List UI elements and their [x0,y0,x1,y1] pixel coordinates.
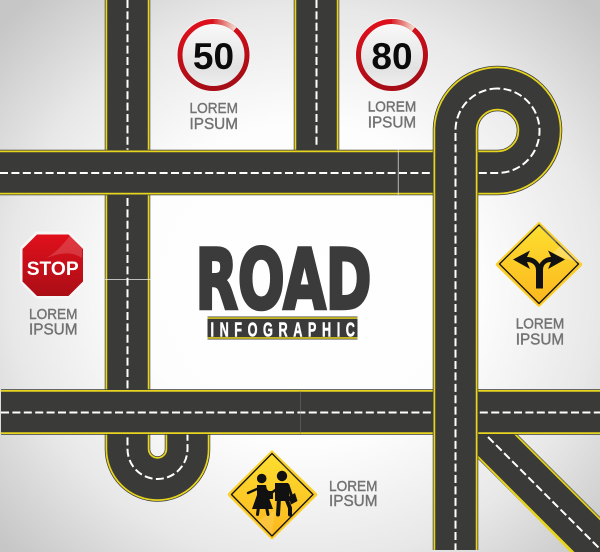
warning sign: fork arrow [496,222,582,306]
speed limit sign 50: 50 [193,36,234,77]
caption: school sign: IPSUM [329,493,378,510]
title: ROAD: ROAD [196,232,372,328]
caption: 50 sign: IPSUM [190,116,238,133]
caption: stop sign: IPSUM [29,322,78,338]
road: lower horizontal [1,391,600,434]
icon: fork arrow [513,250,565,288]
speed limit sign 50 [176,18,250,92]
speed limit sign 80: 80 [371,36,413,77]
stop sign [20,232,86,298]
warning sign: school children [228,451,316,538]
icon: child left [248,474,278,514]
caption: fork sign: LOREM [516,316,564,333]
road: upper left vertical [105,0,150,170]
caption: stop sign: LOREM [29,306,78,323]
road: left vertical with bottom U-turn [105,180,188,479]
road: top horizontal with loop [0,88,540,195]
road: main vertical rising into loop [456,88,498,550]
caption: 80 sign: LOREM [368,98,416,116]
caption: 80 sign: IPSUM [368,114,416,132]
caption: fork sign: IPSUM [516,332,564,348]
icon: child right [275,471,298,514]
caption: 50 sign: LOREM [190,100,238,117]
road: diagonal branch [470,387,600,552]
stop sign: STOP [27,258,79,280]
road: upper middle vertical [294,0,339,170]
caption: school sign: LOREM [329,478,378,495]
speed limit sign 80 [355,18,429,92]
subtitle band: INFOGRAPHIC: INFOGRAPHIC [210,318,355,341]
